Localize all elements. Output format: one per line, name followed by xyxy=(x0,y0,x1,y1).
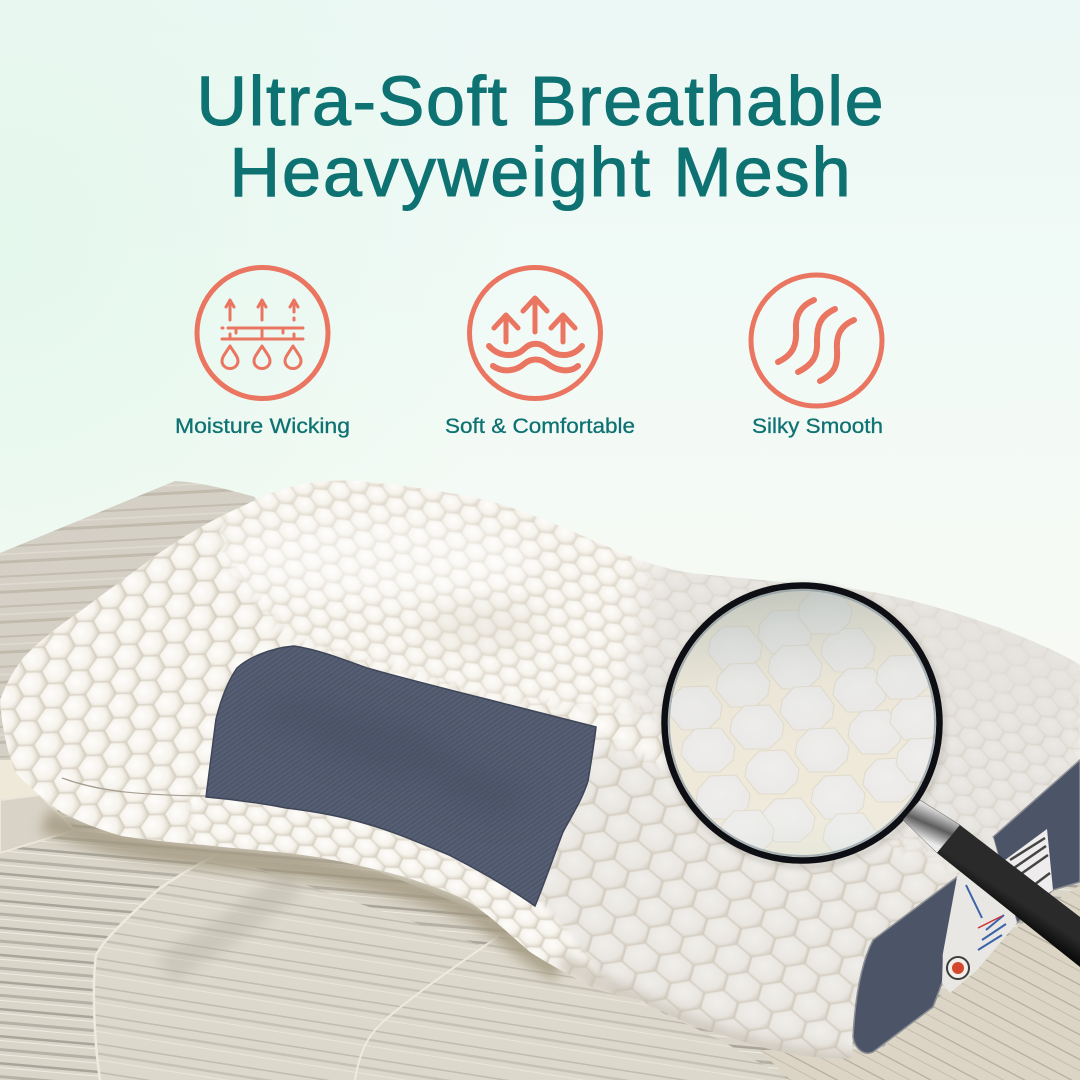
soft shading: right side grey tone xyxy=(1043,657,1044,658)
magnifier shadow xyxy=(664,586,944,866)
label: moisture wicking: Moisture Wicking xyxy=(175,414,350,438)
sewn-in tag: round badge xyxy=(947,957,969,979)
soft shading: top highlight xyxy=(220,520,540,600)
feature: soft and comfortable xyxy=(445,268,635,438)
magnifier ring highlight xyxy=(669,590,935,856)
icon: soft waves and arrows xyxy=(470,268,600,398)
blanket: middle fold highlighted edge xyxy=(94,855,218,1080)
mesh panel mottled shading xyxy=(260,697,535,828)
sewn-in tag: care label xyxy=(942,837,1017,993)
pillow end panel: lower lobe xyxy=(853,877,977,1053)
feature: silky smooth xyxy=(751,275,883,438)
blanket: back layer xyxy=(0,481,300,780)
magnifying glass xyxy=(660,582,1080,967)
soft shading: underside edge xyxy=(560,960,860,1062)
feature: moisture wicking xyxy=(175,268,350,438)
magnifier lens view of hexagon mesh xyxy=(668,588,936,857)
blanket: base layer xyxy=(0,800,1080,1080)
shadow under pillow xyxy=(45,820,560,970)
icon: silky smooth curves xyxy=(751,275,882,406)
magnifier handle connector xyxy=(903,800,960,853)
title: Ultra-Soft Breathable xyxy=(196,62,884,140)
magnifier handle xyxy=(937,825,1080,967)
sewn-in tag: upper label xyxy=(1005,829,1053,905)
blanket: cream corner xyxy=(0,760,80,835)
seam line xyxy=(62,778,205,796)
pillow xyxy=(0,470,1080,1080)
blanket: front fold xyxy=(355,935,790,1080)
blanket fold shadow xyxy=(165,880,295,970)
title: Heavyweight Mesh xyxy=(230,133,850,211)
blanket: front fold highlighted edge xyxy=(355,935,500,1080)
blanket: right side weave xyxy=(760,885,1080,1080)
pillow end panel: upper part xyxy=(993,760,1080,923)
pillow quilted surface xyxy=(0,470,1080,1080)
soft shading: central dip xyxy=(430,604,528,646)
magnifier ring xyxy=(664,586,940,860)
blanket: middle fold xyxy=(94,855,640,1080)
bedding blanket xyxy=(0,481,1080,1080)
label: soft and comfortable: Soft & Comfortable xyxy=(445,414,635,438)
label: silky smooth: Silky Smooth xyxy=(752,414,883,438)
grey mesh side panel xyxy=(206,646,596,906)
icon: moisture wicking xyxy=(197,268,328,398)
sewn-in tag: print details xyxy=(966,885,1006,950)
blanket: left folded strip xyxy=(0,795,75,853)
title xyxy=(196,62,884,211)
